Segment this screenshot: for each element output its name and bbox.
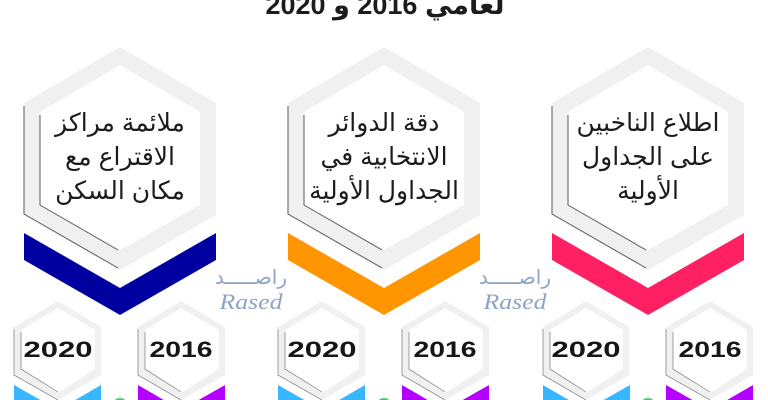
watermark: Rased right: راصـــــد — [479, 265, 551, 289]
text: district accuracy: الجداول الأولية — [309, 174, 459, 206]
text: voter awareness: اطلاع الناخبين — [577, 109, 719, 137]
small hexagon: 2020 column 2: 2020 — [288, 337, 356, 362]
small hexagon: 2016 column 2: 2016 — [414, 337, 476, 362]
small hexagon: 2016 column 1: 2016 — [150, 337, 212, 362]
small hexagon: 2020 column 3: 2020 — [552, 337, 620, 362]
small hexagon: 2016 column 3: 2016 — [678, 337, 742, 362]
small hexagon: 2016 column 2 — [402, 301, 489, 400]
small hexagon: 2020 column 1: 2020 — [24, 337, 92, 362]
text: polling station suitability: مكان السكن — [55, 177, 185, 205]
watermark: Rased left: راصـــــد — [215, 265, 287, 289]
panel: district accuracy — [288, 47, 480, 315]
text: district accuracy: دقة الدوائر — [327, 109, 439, 138]
watermark: Rased left: Rased — [218, 289, 284, 314]
text: district accuracy — [309, 109, 459, 206]
watermark: Rased left — [215, 265, 287, 314]
text: voter awareness: على الجداول — [582, 143, 714, 172]
text: polling station suitability: ملائمة مراكز — [53, 109, 185, 137]
text: voter awareness: الأولية — [617, 174, 679, 206]
ribbon: pink chevron — [552, 233, 744, 315]
text: polling station suitability: الاقتراع مع — [65, 143, 175, 172]
watermark: Rased right — [479, 265, 551, 314]
icon: large hexagon frame — [552, 47, 744, 270]
panel: voter awareness — [552, 47, 744, 315]
text: polling station suitability — [53, 109, 185, 205]
panel: polling station suitability — [24, 47, 216, 315]
watermark: Rased right: Rased — [482, 289, 548, 314]
text: district accuracy: الانتخابية في — [320, 143, 448, 171]
small hexagon: 2020 column 1 — [14, 301, 101, 400]
small hexagon: 2016 column 1 — [138, 301, 225, 400]
small hexagon: 2020 column 3 — [543, 301, 630, 400]
ribbon: orange chevron — [288, 233, 480, 315]
icon: green marker column 3 — [640, 398, 656, 400]
small hexagon: 2020 column 2 — [278, 301, 365, 400]
icon: green marker column 1 — [112, 398, 128, 400]
small hexagon: 2016 column 3 — [666, 301, 753, 400]
icon: large hexagon frame — [24, 47, 216, 270]
icon: green marker column 2 — [376, 398, 392, 400]
text: voter awareness — [577, 109, 719, 206]
icon: large hexagon frame — [288, 47, 480, 270]
ribbon: navy chevron — [24, 233, 216, 315]
